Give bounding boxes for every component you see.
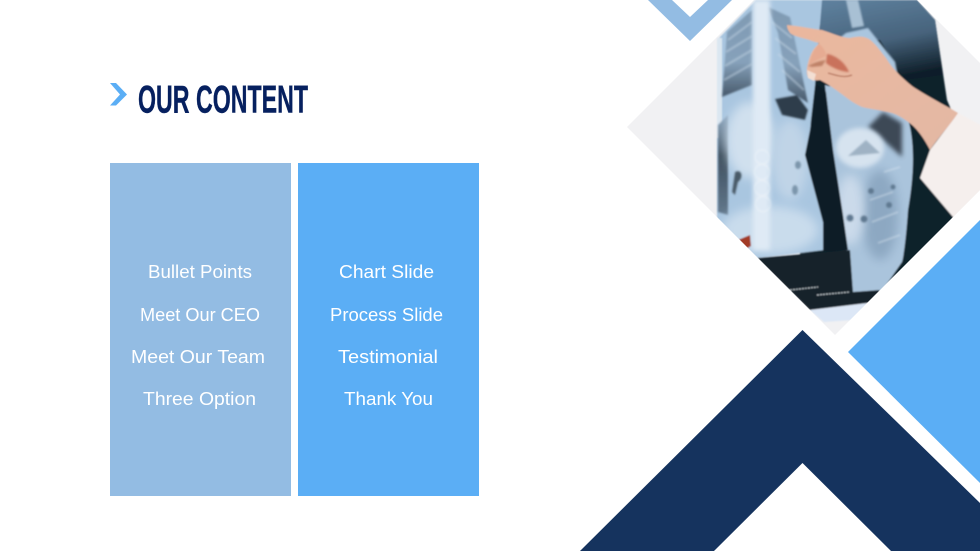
- left x-ray film: [717, 0, 825, 258]
- film caption band: [757, 250, 880, 322]
- panel: right content list: Testimonial: [338, 347, 438, 367]
- fingertip behind film: [738, 235, 751, 249]
- decorative light blue diamond: [848, 220, 980, 483]
- panel: right content list: Thank You: [344, 389, 433, 409]
- panel: left content list: Meet Our Team: [131, 347, 265, 367]
- dark film gap: [805, 84, 848, 251]
- lab coat sleeve: [918, 118, 980, 218]
- photo: doctor pointing at spine x-ray in diamond frame: [620, 0, 980, 340]
- panel: left content list: Three Option: [143, 389, 256, 409]
- icon: title chevron: [110, 83, 127, 106]
- panel: left content list: Bullet Points: [148, 262, 252, 282]
- panel: left content list: Meet Our CEO: [140, 305, 260, 325]
- hand: [787, 25, 958, 150]
- decorative navy chevron: [580, 330, 980, 551]
- panel: right content list: [298, 163, 479, 496]
- decorative top chevron: [648, 0, 732, 41]
- panel: right content list: Chart Slide: [339, 262, 434, 282]
- right x-ray film: [799, 0, 954, 300]
- title: OUR CONTENT: [138, 78, 308, 122]
- panel: right content list: Process Slide: [330, 305, 443, 325]
- panel: left content list: [110, 163, 291, 496]
